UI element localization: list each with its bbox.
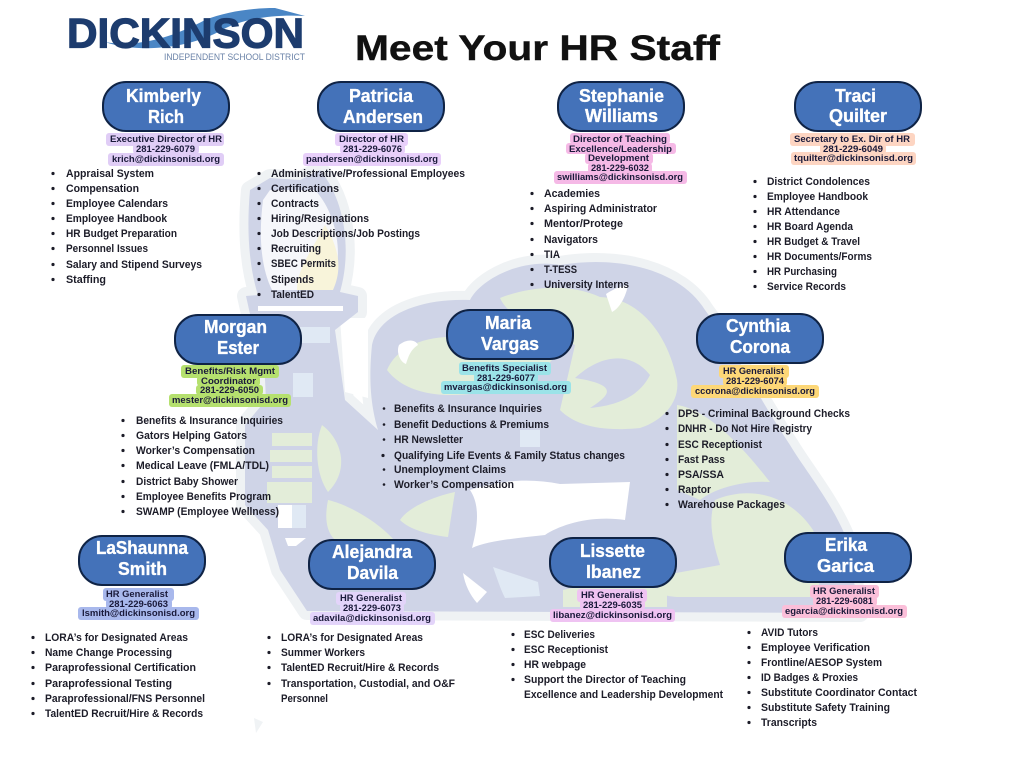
duties list: Patricia Andersen: Stipends — [271, 274, 314, 286]
duties list: Cynthia Corona: ESC Receptionist — [678, 439, 762, 451]
duties list: Kimberly Rich: Employee Handbook — [66, 213, 168, 225]
name pill: Morgan Ester: Morgan — [204, 316, 267, 337]
duties list: Cynthia Corona — [665, 408, 850, 511]
duties list: Stephanie Williams: Academies — [544, 188, 600, 200]
duties list: Erika Garica: ID Badges & Proxies — [761, 672, 858, 684]
contact: Lissette Ibanez — [550, 589, 675, 622]
duties list: Morgan Ester: Gators Helping Gators — [136, 430, 247, 442]
panel: Morgan Ester — [121, 315, 301, 518]
name pill: LaShaunna Smith: LaShaunna — [96, 537, 189, 558]
contact: Stephanie Williams: Director of Teaching — [573, 134, 667, 144]
duties list: Stephanie Williams: Mentor/Protege — [544, 218, 623, 230]
duties list: Traci Quilter: HR Documents/Forms — [767, 251, 872, 263]
name pill: Erika Garica: Garica — [817, 555, 875, 576]
duties list: Kimberly Rich: Personnel Issues — [66, 243, 148, 255]
contact: Morgan Ester — [169, 365, 291, 407]
duties list: Cynthia Corona: Fast Pass — [678, 454, 725, 466]
contact: Cynthia Corona: 281-229-6074 — [726, 376, 784, 386]
name pill: Stephanie Williams: Williams — [585, 105, 658, 126]
duties list: LaShaunna Smith: LORA’s for Designated Areas — [45, 632, 188, 644]
logo: Dickinson ISD: DICKINSON — [67, 10, 304, 56]
duties list: Maria Vargas: Benefits & Insurance Inquiries — [394, 403, 542, 415]
name pill: Kimberly Rich: Rich — [148, 106, 184, 127]
name pill: Kimberly Rich: Kimberly — [126, 85, 202, 106]
duties list: Traci Quilter: HR Purchasing — [767, 266, 837, 278]
contact: LaShaunna Smith: lsmith@dickinsonisd.org — [82, 608, 195, 618]
contact: LaShaunna Smith: HR Generalist — [106, 589, 168, 599]
name pill: Erika Garica: Erika — [825, 534, 868, 555]
duties list: Cynthia Corona: Warehouse Packages — [678, 499, 785, 511]
contact: Morgan Ester: Coordinator — [201, 376, 257, 386]
name pill: Cynthia Corona: Corona — [730, 336, 791, 357]
contact: Kimberly Rich: Executive Director of HR — [110, 134, 223, 144]
duties list: Maria Vargas: Worker’s Compensation — [394, 479, 514, 491]
contact: Stephanie Williams: 281-229-6032 — [591, 163, 649, 173]
watermark: gator mascot holding torch — [245, 170, 860, 733]
contact: Cynthia Corona — [691, 365, 819, 398]
contact: Lissette Ibanez: 281-229-6035 — [583, 600, 642, 610]
duties list: Cynthia Corona: Raptor — [678, 484, 712, 496]
panel: Traci Quilter — [753, 82, 921, 293]
contact: Erika Garica — [782, 585, 907, 618]
duties list: Traci Quilter: District Condolences — [767, 176, 870, 188]
contact: Alejandra Davila — [310, 592, 435, 625]
panel: Patricia Andersen — [257, 82, 465, 301]
name pill: LaShaunna Smith: Smith — [118, 558, 167, 579]
contact: Patricia Andersen: pandersen@dickinsonisd.org — [306, 154, 438, 164]
duties list: Stephanie Williams — [530, 188, 658, 291]
duties list: Cynthia Corona: DNHR - Do Not Hire Registry — [678, 423, 813, 435]
duties list: Patricia Andersen: SBEC Permits — [271, 258, 336, 270]
duties list: Stephanie Williams: Aspiring Administrator — [544, 203, 658, 215]
contact: Maria Vargas: 281-229-6077 — [477, 373, 535, 383]
duties list: Maria Vargas: Unemployment Claims — [394, 464, 506, 476]
name pill: Morgan Ester: Ester — [217, 337, 259, 358]
contact: Cynthia Corona: HR Generalist — [723, 366, 784, 376]
duties list: Patricia Andersen: Hiring/Resignations — [271, 213, 369, 225]
duties list: Lissette Ibanez — [511, 629, 723, 701]
contact: Erika Garica: HR Generalist — [813, 586, 875, 596]
duties list: Lissette Ibanez: ESC Deliveries — [524, 629, 595, 641]
name pill: Alejandra Davila: Davila — [347, 562, 399, 583]
duties list: Maria Vargas: Benefit Deductions & Premiums — [394, 419, 549, 431]
contact: Stephanie Williams — [554, 133, 687, 184]
name pill: Alejandra Davila: Alejandra — [332, 541, 413, 562]
duties list: Erika Garica: AVID Tutors — [761, 627, 818, 639]
duties list: Maria Vargas — [381, 403, 625, 491]
duties list: Morgan Ester: Medical Leave (FMLA/TDL) — [136, 460, 269, 472]
duties list: Lissette Ibanez: ESC Receptionist — [524, 644, 608, 656]
duties list: Traci Quilter: HR Attendance — [767, 206, 840, 218]
duties list: Kimberly Rich — [51, 168, 202, 286]
name pill: Patricia Andersen: Andersen — [343, 106, 423, 127]
name pill: Lissette Ibanez — [550, 538, 676, 587]
contact: Patricia Andersen: 281-229-6076 — [343, 144, 402, 154]
contact: Traci Quilter: tquilter@dickinsonisd.org — [794, 153, 913, 163]
name pill: Alejandra Davila — [309, 540, 435, 589]
contact: Traci Quilter: 281-229-6049 — [823, 144, 883, 154]
duties list: Alejandra Davila — [267, 632, 455, 705]
contact: Lissette Ibanez: HR Generalist — [581, 590, 643, 600]
duties list: Morgan Ester: Benefits & Insurance Inquiries — [136, 415, 283, 427]
name pill: Stephanie Williams: Stephanie — [579, 85, 664, 106]
duties list: Traci Quilter: Service Records — [767, 281, 846, 293]
duties list: Morgan Ester: SWAMP (Employee Wellness) — [136, 506, 279, 518]
name pill: Traci Quilter — [795, 82, 921, 131]
duties list: LaShaunna Smith: Paraprofessional Certification — [45, 662, 196, 674]
contact: Maria Vargas — [441, 362, 571, 394]
name pill: Cynthia Corona: Cynthia — [726, 315, 791, 336]
duties list: Alejandra Davila: LORA’s for Designated Areas — [281, 632, 423, 644]
contact: Alejandra Davila: adavila@dickinsonisd.org — [313, 613, 431, 623]
contact: Stephanie Williams: swilliams@dickinsonisd.org — [557, 172, 683, 182]
contact: Kimberly Rich: krich@dickinsonisd.org — [112, 154, 220, 164]
contact: Patricia Andersen: Director of HR — [339, 134, 405, 144]
contact: Morgan Ester: 281-229-6050 — [200, 385, 259, 395]
duties list: Lissette Ibanez: Support the Director of Teaching — [524, 674, 686, 686]
contact: LaShaunna Smith: 281-229-6063 — [109, 599, 168, 609]
panel: Erika Garica — [747, 533, 917, 729]
duties list: Stephanie Williams: TIA — [544, 249, 560, 261]
duties list: Kimberly Rich: Salary and Stipend Surveys — [66, 259, 202, 271]
duties list: Erika Garica: Substitute Safety Training — [761, 702, 890, 714]
duties list: Patricia Andersen: Certifications — [271, 183, 339, 195]
duties list: LaShaunna Smith: Name Change Processing — [45, 647, 172, 659]
title: Meet Your HR Staff — [355, 29, 720, 68]
name pill: Lissette Ibanez: Lissette — [580, 540, 645, 561]
duties list: LaShaunna Smith — [31, 632, 205, 720]
duties list: Morgan Ester: Worker’s Compensation — [136, 445, 255, 457]
duties list: Erika Garica: Transcripts — [761, 717, 817, 729]
duties list: Alejandra Davila: Summer Workers — [281, 647, 365, 659]
duties list: Stephanie Williams: University Interns — [544, 279, 629, 291]
duties list: Erika Garica: Employee Verification — [761, 642, 870, 654]
contact: Stephanie Williams: Development — [588, 153, 649, 163]
name pill: Lissette Ibanez: Ibanez — [586, 561, 641, 582]
duties list: Alejandra Davila: Personnel — [281, 693, 328, 705]
name pill: Traci Quilter: Quilter — [829, 105, 887, 126]
contact: Cynthia Corona: ccorona@dickinsonisd.org — [695, 386, 815, 396]
panel: Cynthia Corona — [665, 314, 850, 511]
duties list: Kimberly Rich: Staffing — [66, 274, 106, 286]
duties list: Kimberly Rich: Employee Calendars — [66, 198, 168, 210]
contact: Alejandra Davila: 281-229-6073 — [343, 603, 401, 613]
duties list: Maria Vargas: HR Newsletter — [394, 434, 464, 446]
duties list: Traci Quilter: Employee Handbook — [767, 191, 869, 203]
duties list: LaShaunna Smith: TalentED Recruit/Hire & Records — [45, 708, 203, 720]
name pill: Stephanie Williams — [558, 82, 684, 131]
contact: Erika Garica: 281-229-6081 — [816, 596, 873, 606]
panel: Stephanie Williams — [530, 82, 687, 291]
duties list: Traci Quilter: HR Budget & Travel — [767, 236, 860, 248]
contact: Patricia Andersen — [303, 133, 441, 166]
contact: Kimberly Rich — [106, 133, 224, 166]
logo: Dickinson ISD: INDEPENDENT SCHOOL DISTRICT — [164, 52, 305, 63]
name pill: Patricia Andersen: Patricia — [349, 85, 414, 106]
duties list: Patricia Andersen: Job Descriptions/Job Postings — [271, 228, 420, 240]
panel: Maria Vargas — [381, 310, 625, 491]
duties list: Lissette Ibanez: Excellence and Leadership Development — [524, 689, 723, 701]
duties list: Morgan Ester: District Baby Shower — [136, 476, 239, 488]
duties list: Kimberly Rich: Compensation — [66, 183, 139, 195]
contact: Lissette Ibanez: libanez@dickinsonisd.org — [553, 610, 672, 620]
contact: LaShaunna Smith — [78, 588, 199, 620]
duties list: Lissette Ibanez: HR webpage — [524, 659, 586, 671]
name pill: Kimberly Rich — [103, 82, 229, 131]
name pill: Patricia Andersen — [318, 82, 444, 131]
contact: Maria Vargas: Benefits Specialist — [462, 363, 547, 373]
contact: Traci Quilter — [790, 133, 916, 165]
duties list: Maria Vargas: Qualifying Life Events & Family Status changes — [394, 450, 625, 462]
duties list: Patricia Andersen: Recruiting — [271, 243, 321, 255]
contact: Morgan Ester: mester@dickinsonisd.org — [172, 395, 288, 405]
contact: Kimberly Rich: 281-229-6079 — [136, 144, 195, 154]
duties list: Stephanie Williams: T-TESS — [544, 264, 577, 276]
duties list: Patricia Andersen: Contracts — [271, 198, 319, 210]
name pill: Erika Garica — [785, 533, 911, 582]
panel: Kimberly Rich — [51, 82, 229, 286]
contact: Maria Vargas: mvargas@dickinsonisd.org — [444, 382, 567, 392]
duties list: Cynthia Corona: PSA/SSA — [678, 469, 724, 481]
duties list: Kimberly Rich: HR Budget Preparation — [66, 228, 177, 240]
name pill: Maria Vargas — [447, 310, 573, 359]
name pill: Maria Vargas: Vargas — [481, 333, 539, 354]
duties list: Morgan Ester — [121, 415, 283, 518]
duties list: Alejandra Davila: TalentED Recruit/Hire & Records — [281, 662, 439, 674]
contact: Erika Garica: egarcia@dickinsonisd.org — [785, 606, 903, 616]
name pill: Traci Quilter: Traci — [835, 85, 876, 106]
duties list: Kimberly Rich: Appraisal System — [66, 168, 154, 180]
panel: Alejandra Davila — [267, 540, 455, 705]
duties list: LaShaunna Smith: Paraprofessional/FNS Personnel — [45, 693, 205, 705]
duties list: Erika Garica: Substitute Coordinator Contact — [761, 687, 917, 699]
name pill: Maria Vargas: Maria — [485, 312, 532, 333]
contact: Morgan Ester: Benefits/Risk Mgmt — [185, 366, 275, 376]
duties list: Patricia Andersen: TalentED — [271, 289, 314, 301]
duties list: Traci Quilter — [753, 176, 872, 293]
contact: Stephanie Williams: Excellence/Leadership — [569, 144, 673, 154]
contact: Traci Quilter: Secretary to Ex. Dir of HR — [794, 134, 911, 144]
panel: LaShaunna Smith — [31, 536, 205, 720]
name pill: Cynthia Corona — [697, 314, 823, 363]
duties list: Patricia Andersen — [257, 168, 465, 301]
name pill: Morgan Ester — [175, 315, 301, 364]
duties list: Erika Garica: Frontline/AESOP System — [761, 657, 882, 669]
duties list: Patricia Andersen: Administrative/Professional Employees — [271, 168, 465, 180]
name pill: LaShaunna Smith — [79, 536, 205, 585]
duties list: Erika Garica — [747, 627, 917, 729]
duties list: Stephanie Williams: Navigators — [544, 234, 598, 246]
panel: Lissette Ibanez — [511, 538, 723, 701]
duties list: Cynthia Corona: DPS - Criminal Background Checks — [678, 408, 850, 420]
duties list: Alejandra Davila: Transportation, Custodial, and O&F — [281, 678, 455, 690]
duties list: Morgan Ester: Employee Benefits Program — [136, 491, 271, 503]
contact: Alejandra Davila: HR Generalist — [340, 593, 402, 603]
duties list: LaShaunna Smith: Paraprofessional Testing — [45, 678, 172, 690]
duties list: Traci Quilter: HR Board Agenda — [767, 221, 854, 233]
